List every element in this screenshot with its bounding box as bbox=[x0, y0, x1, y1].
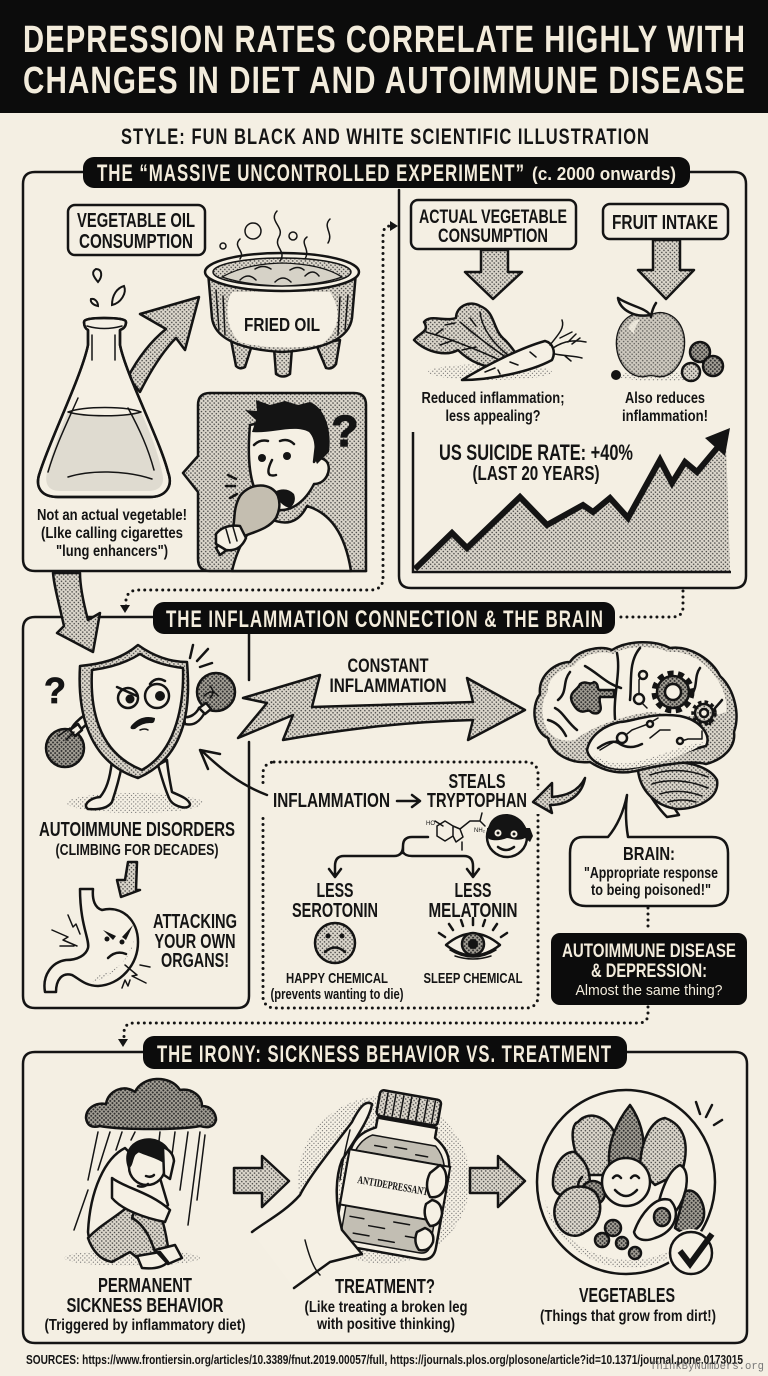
label: fruit intake bbox=[603, 204, 728, 239]
caption: reduced inflammation: Reduced inflammation; bbox=[422, 390, 564, 407]
less serotonin group: LESS bbox=[316, 880, 354, 902]
panel: actual vegetables, fruit and suicide rate bbox=[399, 172, 746, 588]
heading: massive uncontrolled experiment: THE “MASSIVE UNCONTROLLED EXPERIMENT” bbox=[97, 160, 525, 187]
caption: autoimmune disorders: AUTOIMMUNE DISORDERS bbox=[39, 819, 235, 841]
icon: tryptophan molecule: HO bbox=[426, 821, 435, 827]
callout: autoimmune disease and depression: Almost the same thing? bbox=[576, 982, 722, 999]
chart: US suicide rate: US SUICIDE RATE: +40% bbox=[439, 440, 633, 465]
callout: autoimmune disease and depression: & DEPRESSION: bbox=[591, 961, 707, 982]
heading: massive uncontrolled experiment: (c. 2000 onwards) bbox=[532, 164, 676, 184]
text: attacking your own organs bbox=[153, 911, 237, 972]
caption: permanent sickness behavior: SICKNESS BEHAVIOR bbox=[66, 1295, 224, 1317]
callout: brain quote bbox=[570, 795, 728, 906]
label: fruit intake: FRUIT INTAKE bbox=[612, 212, 718, 234]
icon: hand holding antidepressants bbox=[252, 1086, 470, 1288]
label: actual vegetable consumption bbox=[411, 200, 576, 249]
icon: brain bbox=[534, 642, 736, 817]
heading: the irony bbox=[143, 1036, 627, 1069]
caption: autoimmune disorders bbox=[39, 819, 235, 859]
text: attacking your own organs: YOUR OWN bbox=[154, 931, 236, 953]
note: not an actual vegetable: (LIke calling cigarettes bbox=[41, 525, 183, 542]
text: inflammation steals tryptophan: STEALS bbox=[448, 771, 506, 793]
caption: also reduces inflammation: Also reduces bbox=[625, 390, 705, 407]
icon: fryer pot of fried oil: FRIED OIL bbox=[244, 315, 320, 335]
caption: reduced inflammation: less appealing? bbox=[446, 408, 540, 425]
icon: fryer pot of fried oil bbox=[205, 211, 359, 376]
less melatonin group: LESS bbox=[454, 880, 492, 902]
dotted connector: black box to irony panel bbox=[118, 1007, 648, 1047]
caption: treatment: TREATMENT? bbox=[335, 1276, 435, 1298]
hand bbox=[252, 1103, 372, 1288]
brain left lobe squiggle bbox=[571, 682, 614, 713]
less melatonin group: MELATONIN bbox=[428, 900, 518, 922]
arrow: constant inflammation: CONSTANT bbox=[348, 656, 429, 677]
text: inflammation steals tryptophan bbox=[273, 771, 527, 812]
caption: vegetables: (Things that grow from dirt!) bbox=[540, 1308, 716, 1325]
arrow: brain to tryptophan bbox=[533, 778, 585, 813]
caption: vegetables bbox=[540, 1285, 716, 1325]
icon: tryptophan molecule bbox=[426, 813, 486, 850]
question mark: ? bbox=[332, 407, 358, 456]
man shirt bbox=[232, 506, 351, 571]
icon: shield character bbox=[44, 645, 235, 813]
icon: hand holding antidepressants: ANTIDEPRESSANTS bbox=[356, 1174, 433, 1199]
dotted connector: right panel to brain heading bbox=[617, 591, 683, 617]
arrow: down to fruit bbox=[638, 240, 694, 299]
arrow: constant inflammation: INFLAMMATION bbox=[330, 676, 446, 697]
callout: brain quote: BRAIN: bbox=[623, 844, 675, 864]
arrow: down to vegetables bbox=[465, 250, 522, 299]
shield eyes and mouth bbox=[118, 688, 138, 708]
caption: treatment bbox=[304, 1276, 468, 1333]
icon: angry stomach bbox=[44, 889, 150, 992]
icon: thief tryptophan bbox=[487, 814, 533, 857]
label: vegetable oil consumption bbox=[68, 205, 205, 255]
note: not an actual vegetable: "lung enhancers") bbox=[56, 543, 168, 560]
icon: tryptophan molecule: NH₂ bbox=[474, 828, 486, 834]
label: vegetable oil consumption: CONSUMPTION bbox=[79, 231, 193, 253]
arrow: sickness to treatment bbox=[234, 1156, 289, 1207]
callout: autoimmune disease and depression bbox=[551, 933, 747, 1005]
arrow: down to stomach bbox=[117, 862, 140, 897]
less serotonin group: (prevents wanting to die) bbox=[270, 987, 404, 1003]
caption: reduced inflammation bbox=[422, 390, 564, 425]
note: not an actual vegetable: Not an actual vegetable! bbox=[37, 507, 187, 524]
arrow: flask to fried oil bbox=[128, 297, 199, 392]
caption: vegetables: VEGETABLES bbox=[579, 1285, 675, 1307]
callout: man eating fried chicken bbox=[183, 393, 366, 571]
caption: also reduces inflammation: inflammation! bbox=[622, 408, 708, 425]
caption: permanent sickness behavior bbox=[44, 1275, 246, 1334]
caption: also reduces inflammation bbox=[622, 390, 708, 425]
text: attacking your own organs: ATTACKING bbox=[153, 911, 237, 933]
arrow: treatment to vegetables bbox=[470, 1156, 525, 1207]
label: actual vegetable consumption: ACTUAL VEGETABLE bbox=[419, 206, 567, 228]
text: inflammation steals tryptophan: INFLAMMATION bbox=[273, 790, 390, 812]
branching arrows bbox=[329, 837, 479, 877]
arrow: inflammation to shield bbox=[200, 750, 267, 795]
icon: plate of vegetables bbox=[537, 1090, 722, 1277]
panel: vegetable oil experiment bbox=[23, 172, 366, 571]
dotted connector: quote to black box bbox=[646, 908, 650, 932]
caption: permanent sickness behavior: (Triggered by inflammatory diet) bbox=[44, 1317, 246, 1334]
label: actual vegetable consumption: CONSUMPTION bbox=[438, 225, 548, 247]
less serotonin group: HAPPY CHEMICAL bbox=[286, 970, 388, 987]
arrow: constant inflammation bbox=[238, 656, 525, 740]
less serotonin group bbox=[270, 880, 404, 1003]
dotted connector: panel one to right panel and back bbox=[120, 221, 398, 613]
text: inflammation steals tryptophan: TRYPTOPHAN bbox=[427, 790, 527, 812]
brain gears and circuits bbox=[600, 671, 715, 750]
question mark beside shield: ? bbox=[44, 670, 66, 711]
caption: autoimmune disorders: (CLIMBING FOR DECADES) bbox=[56, 842, 218, 859]
icon: sad person under rain cloud bbox=[64, 1079, 216, 1268]
chart: US suicide rate: (LAST 20 YEARS) bbox=[472, 463, 600, 485]
arrow: into autoimmune panel bbox=[53, 573, 100, 652]
panel: irony of sickness behavior vs treatment bbox=[23, 1052, 747, 1343]
icon: lettuce and carrot bbox=[414, 304, 586, 380]
heading: inflammation connection bbox=[153, 602, 615, 634]
icon: flask of vegetable oil bbox=[38, 269, 170, 497]
less melatonin group bbox=[424, 880, 522, 987]
watermark: ThinkByNumbers.org bbox=[650, 1361, 764, 1373]
label: vegetable oil consumption: VEGETABLE OIL bbox=[77, 210, 195, 232]
text: attacking your own organs: ORGANS! bbox=[161, 950, 229, 972]
callout: brain quote: "Appropriate response bbox=[584, 865, 718, 882]
man face bbox=[249, 410, 329, 510]
panel: autoimmune disorders bbox=[23, 573, 249, 1008]
man hair bbox=[245, 400, 330, 464]
callout: brain quote: to being poisoned!" bbox=[591, 882, 711, 899]
steam and bubbles bbox=[220, 211, 330, 261]
caption: treatment: (Like treating a broken leg bbox=[304, 1299, 468, 1316]
title banner bbox=[0, 0, 768, 113]
chart: US suicide rate bbox=[413, 428, 731, 572]
caption: permanent sickness behavior: PERMANENT bbox=[98, 1275, 192, 1297]
fried chicken drumstick bbox=[216, 486, 279, 555]
icon: apple and berries bbox=[611, 298, 723, 381]
note: not an actual vegetable bbox=[37, 507, 187, 560]
less serotonin group: SEROTONIN bbox=[292, 900, 378, 922]
dotted box: tryptophan pathway bbox=[258, 762, 546, 1008]
caption: treatment: with positive thinking) bbox=[316, 1316, 455, 1333]
less melatonin group: SLEEP CHEMICAL bbox=[424, 970, 522, 987]
